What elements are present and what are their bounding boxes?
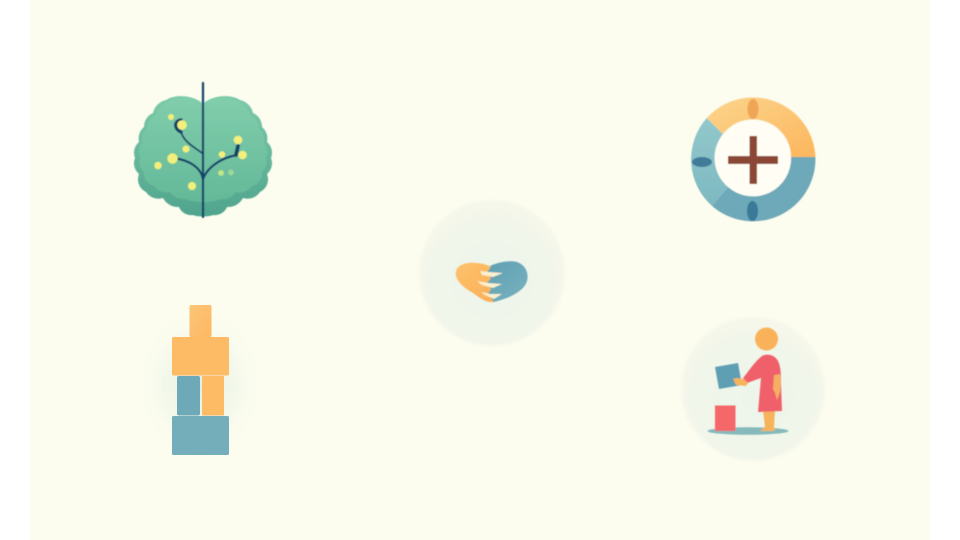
backdrop circle: [419, 200, 565, 346]
icon: plus ring: [671, 77, 835, 241]
wide orange block: [172, 337, 229, 376]
orange sleeve drip: [773, 374, 781, 400]
glowing nodes: [154, 114, 247, 190]
light blue ring segment: [691, 118, 728, 206]
hands: [456, 261, 528, 302]
middle blue block: [177, 376, 200, 416]
plus sign: [728, 136, 778, 184]
orange ring segment: [707, 97, 816, 157]
dress and arm: [743, 355, 782, 412]
red box: [715, 406, 736, 431]
head: [755, 328, 778, 350]
backdrop circle: [681, 317, 825, 461]
blue hand: [484, 261, 528, 302]
orange hand: [456, 263, 494, 302]
tree trunk and branches: [173, 83, 238, 217]
icon: handshake: [419, 200, 565, 346]
glow: [134, 305, 266, 465]
ring markers: [692, 99, 758, 221]
icon: stacked blocks: [134, 305, 266, 465]
middle orange block: [202, 376, 224, 416]
white centre: [715, 120, 791, 196]
base blue block: [172, 416, 229, 455]
legs: [760, 410, 775, 431]
brain lobes: [134, 96, 272, 216]
icon: person placing box: [681, 317, 825, 461]
held blue box: [715, 363, 742, 389]
top orange block: [190, 305, 212, 337]
soft halo: [671, 77, 835, 241]
icon: brain tree: [134, 83, 272, 217]
figure: [708, 328, 788, 435]
hand: [733, 378, 748, 386]
dark blue ring segment: [712, 157, 816, 221]
ground shadow: [708, 427, 788, 435]
fingers: [477, 271, 503, 299]
